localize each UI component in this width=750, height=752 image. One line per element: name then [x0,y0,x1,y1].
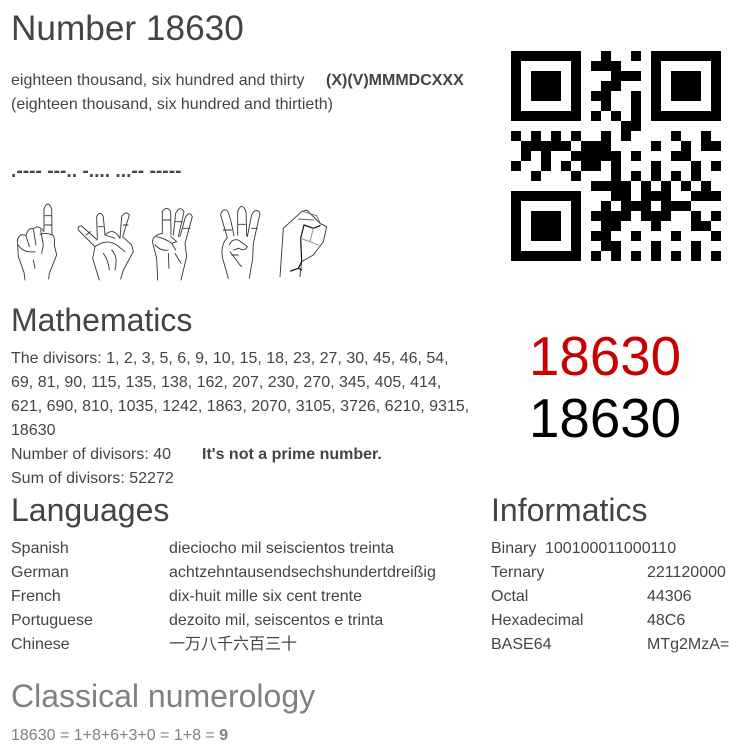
heading: informatics: Informatics [491,492,647,528]
number in words: eighteen thousand, six hundred and thirty [11,72,305,89]
informatics table: BASE64 [491,636,551,653]
red number: 18630 [529,325,681,387]
icon: hand digit 6 [152,208,192,280]
informatics table: 221120000 [647,564,726,581]
languages table: 一万八千六百三十 [169,636,297,653]
divisors list: 69, 81, 90, 115, 135, 138, 162, 207, 230, 270, 345, 405, 414, [11,374,441,391]
divisors list [11,350,469,439]
numerology sum: 18630 = 1+8+6+3+0 = 1+8 = 9 [11,727,228,744]
informatics table: Ternary [491,564,544,581]
divisors list: 621, 690, 810, 1035, 1242, 1863, 2070, 3105, 3726, 6210, 9315, [11,398,469,415]
heading: classical numerology: Classical numerology [11,678,315,714]
informatics table: Hexadecimal [491,612,583,629]
black number: 18630 [529,387,681,449]
informatics table: MTg2MzA= [647,636,729,653]
languages table [11,540,436,653]
informatics table: 100100011000110 [545,540,676,557]
languages table: dix-huit mille six cent trente [169,588,362,605]
languages table: French [11,588,61,605]
languages table: Chinese [11,636,70,653]
icon: hand digit 8 [78,213,133,280]
ordinal in words: (eighteen thousand, six hundred and thirtieth) [11,96,333,113]
morse code: .---- ---.. -.... ...-- ----- [11,161,181,182]
languages table: achtzehntausendsechshundertdreißig [169,564,436,581]
divisors list: 18630 [11,422,56,439]
number of divisors: Number of divisors: 40 [11,446,171,463]
sum of divisors: Sum of divisors: 52272 [11,470,174,487]
informatics table: 48C6 [647,612,685,629]
icon: hand digit 3 [221,206,260,278]
sign language hands [16,204,328,280]
informatics table: Octal [491,588,528,605]
languages table: Spanish [11,540,69,557]
informatics table: Binary [491,540,536,557]
icon: hand digit 1 [17,204,57,280]
informatics table [491,540,729,653]
divisors list: The divisors: 1, 2, 3, 5, 6, 9, 10, 15, 18, 23, 27, 30, 45, 46, 54, [11,350,449,367]
languages table: Portuguese [11,612,93,629]
prime status: It's not a prime number. [202,446,382,463]
icon: hand digit 0 [280,210,327,277]
heading: languages: Languages [11,492,169,528]
informatics table: 44306 [647,588,692,605]
languages table: dieciocho mil seiscientos treinta [169,540,394,557]
title: Number 18630 [11,9,244,48]
languages table: German [11,564,69,581]
QR code [511,51,721,261]
heading: mathematics: Mathematics [11,302,192,338]
languages table: dezoito mil, seiscentos e trinta [169,612,383,629]
roman numeral: (X)(V)MMMDCXXX [326,72,464,89]
